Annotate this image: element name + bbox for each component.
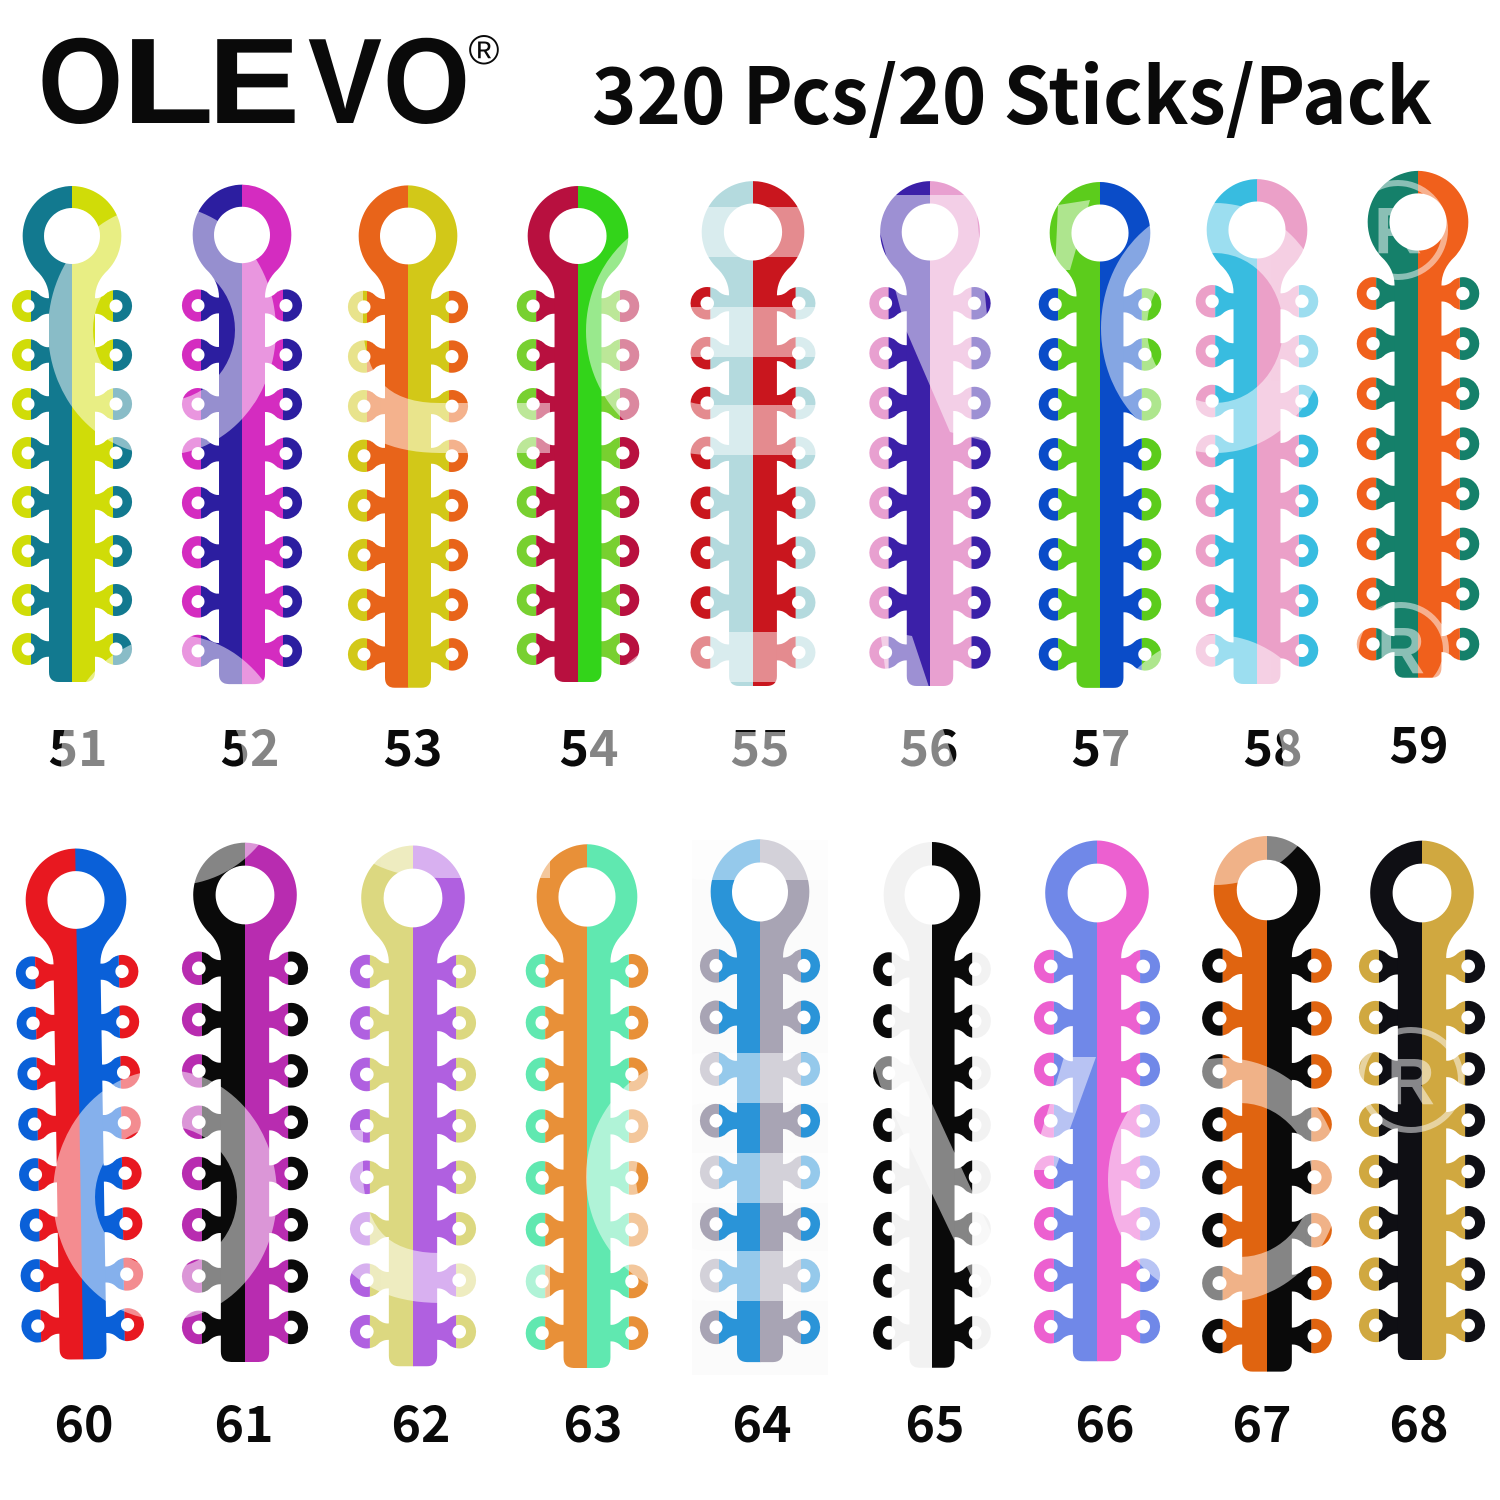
number labels row 1: [48, 706, 1448, 781]
translucent OLEVO watermark overlay: R: [1377, 613, 1425, 687]
stick 54: [517, 186, 639, 682]
number labels row 2: [54, 1385, 1448, 1457]
number labels row 2: 63: [564, 1385, 622, 1457]
stick 62: [350, 846, 476, 1366]
translucent OLEVO watermark overlay: R: [1387, 1044, 1435, 1118]
logo: OLEVO: L: [122, 13, 214, 149]
number labels row 2: 60: [54, 1385, 114, 1457]
number labels row 2: 66: [1076, 1385, 1134, 1457]
stick 51: [12, 186, 132, 682]
number labels row 1: 54: [560, 709, 618, 781]
title: pack quantity: 320 Pcs/20 Sticks/Pack: [592, 35, 1432, 147]
number labels row 2: 65: [906, 1385, 964, 1457]
stick 53: [348, 185, 468, 688]
stick 64: [700, 839, 820, 1362]
number labels row 1: 53: [384, 709, 442, 781]
stick 57: [1039, 182, 1161, 688]
number labels row 1: 59: [1390, 706, 1448, 778]
number labels row 1: 55: [730, 709, 790, 781]
number labels row 2: 68: [1390, 1385, 1448, 1457]
number labels row 1: 58: [1244, 709, 1302, 781]
stick 56: [869, 181, 991, 686]
stick 63: [526, 844, 648, 1368]
stick 68: [1359, 841, 1485, 1360]
number labels row 1: 51: [48, 709, 108, 781]
logo: OLEVO: V: [308, 13, 382, 149]
number labels row 2: 62: [392, 1385, 450, 1457]
logo: OLEVO: O: [383, 13, 470, 149]
stick 65: [873, 842, 991, 1368]
stick 61: [182, 843, 308, 1362]
number labels row 2: 64: [732, 1385, 792, 1457]
number labels row 2: 61: [214, 1385, 274, 1457]
number labels row 1: 57: [1072, 709, 1130, 781]
stick 58: [1196, 179, 1318, 684]
stick 67: [1202, 836, 1332, 1372]
stick 66: [1034, 840, 1160, 1361]
logo: OLEVO: [38, 13, 500, 149]
number labels row 1: 52: [220, 709, 280, 781]
translucent OLEVO watermark overlay: [48, 183, 1461, 1320]
logo registered mark: ®: [469, 26, 500, 73]
stick 59: [1357, 171, 1479, 678]
logo: OLEVO: O: [38, 13, 123, 149]
faint photo background behind stick 64: [692, 840, 828, 1375]
stick 52: [182, 185, 302, 684]
translucent OLEVO watermark overlay: R: [1374, 193, 1422, 267]
logo: OLEVO: E: [208, 13, 300, 149]
number labels row 2: 67: [1232, 1385, 1292, 1457]
number labels row 1: 56: [900, 709, 958, 781]
stick 55: [691, 181, 815, 686]
stick 60: [14, 848, 144, 1360]
